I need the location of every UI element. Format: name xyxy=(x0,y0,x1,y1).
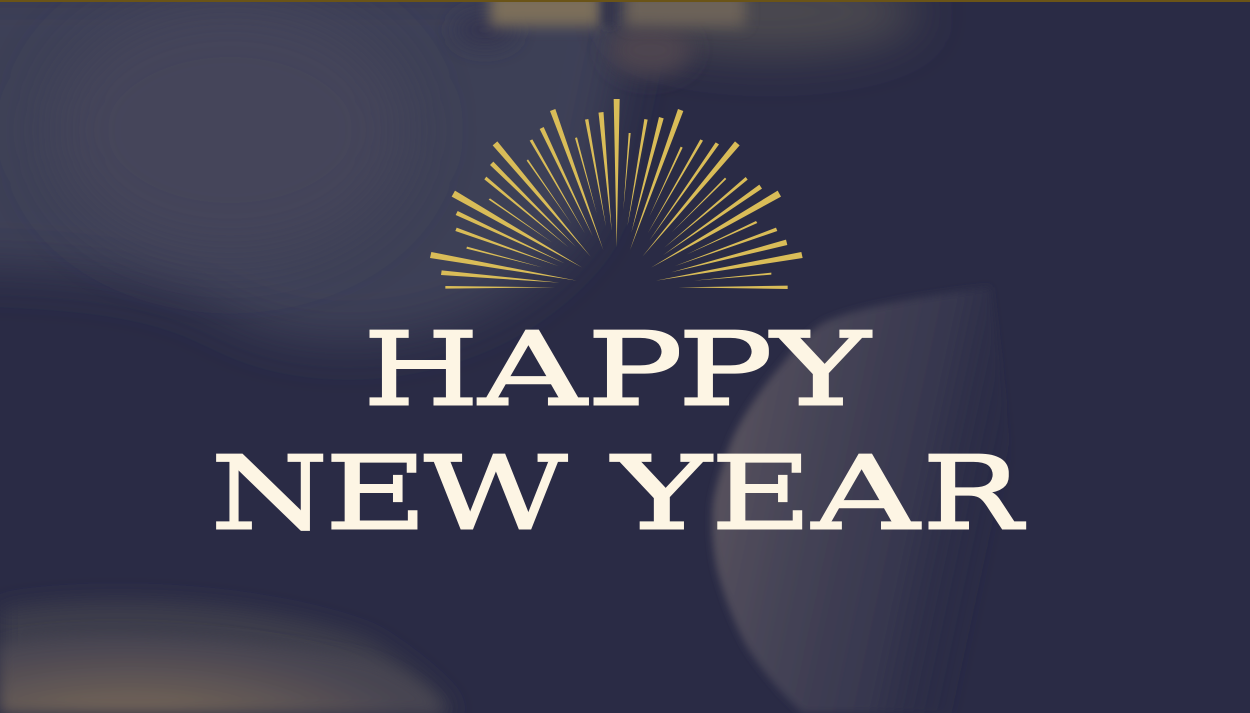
title: E xyxy=(710,435,813,552)
title xyxy=(210,311,1026,552)
title: P xyxy=(677,311,774,428)
title: Y xyxy=(767,311,872,428)
title: H xyxy=(363,311,480,428)
title: N xyxy=(210,435,329,552)
title: E xyxy=(324,435,428,552)
title: R xyxy=(922,435,1026,552)
title: W xyxy=(424,435,568,552)
icon: golden firework burst xyxy=(430,99,803,289)
title: A xyxy=(810,435,922,552)
title: P xyxy=(586,311,684,428)
title: Y xyxy=(608,435,713,552)
title: A xyxy=(476,311,590,428)
